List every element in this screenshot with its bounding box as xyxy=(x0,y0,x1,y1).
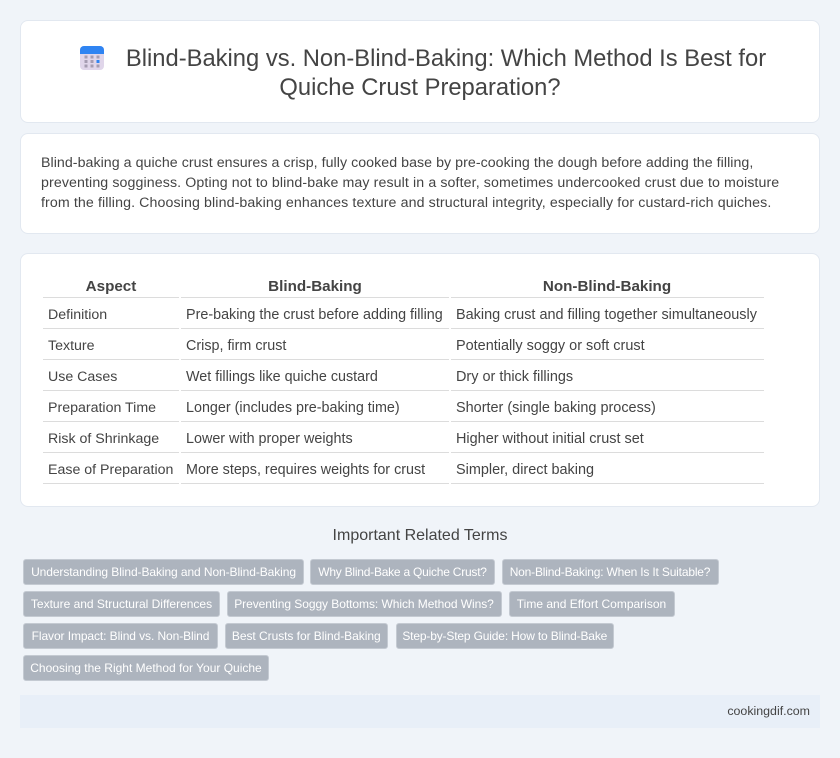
row: Definition: Baking crust and filling together simultaneously xyxy=(456,307,757,323)
row: Definition: Definition xyxy=(48,307,107,323)
intro text: from the filling. Choosing blind-baking enhances texture and structural integrity, especially for custard-rich quiches. xyxy=(41,195,771,211)
column header: Blind-Baking: Blind-Baking xyxy=(268,278,362,295)
panel: comparison table xyxy=(20,253,820,507)
footer source: cookingdif.com xyxy=(727,704,810,718)
panel: header xyxy=(20,20,820,123)
column header: Non-Blind-Baking: Non-Blind-Baking xyxy=(543,278,671,295)
tags: related terms xyxy=(23,559,719,681)
row: Texture: Texture xyxy=(48,338,95,354)
tags: related terms: Preventing Soggy Bottoms: Which Method Wins? xyxy=(234,597,494,611)
row: Preparation Time: Shorter (single baking process) xyxy=(456,400,656,416)
row: Definition xyxy=(48,307,757,323)
intro text: Blind-baking a quiche crust ensures a crisp, fully cooked base by pre-cooking the dough before adding the filling, xyxy=(41,155,753,171)
tags: related terms: Time and Effort Comparison xyxy=(517,597,666,611)
row: Definition: Pre-baking the crust before adding filling xyxy=(186,307,443,323)
tags: related terms: Flavor Impact: Blind vs. Non-Blind xyxy=(32,629,209,643)
row: Ease of Preparation xyxy=(48,462,594,478)
row: Risk of Shrinkage: Lower with proper weights xyxy=(186,431,353,447)
row: Texture: Potentially soggy or soft crust xyxy=(456,338,645,354)
title: Blind-Baking vs. Non-Blind-Baking: Which Method Is Best for xyxy=(126,45,766,72)
row: Preparation Time: Longer (includes pre-baking time) xyxy=(186,400,400,416)
column header: Aspect: Aspect xyxy=(86,278,136,295)
row: Ease of Preparation: More steps, requires weights for crust xyxy=(186,462,425,478)
row: Use Cases: Dry or thick fillings xyxy=(456,369,573,385)
row: Risk of Shrinkage: Risk of Shrinkage xyxy=(48,431,159,447)
row: Use Cases xyxy=(48,369,573,385)
panel: intro xyxy=(20,133,820,234)
tags: related terms: Non-Blind-Baking: When Is It Suitable? xyxy=(510,565,710,579)
tags: related terms: Texture and Structural Differences xyxy=(31,597,212,611)
footer bar xyxy=(20,695,820,728)
tags: related terms: Understanding Blind-Baking and Non-Blind-Baking xyxy=(31,565,296,579)
row: Use Cases: Wet fillings like quiche custard xyxy=(186,369,378,385)
tags: related terms: Choosing the Right Method for Your Quiche xyxy=(30,661,262,675)
row: Risk of Shrinkage: Higher without initial crust set xyxy=(456,431,644,447)
heading: related terms: Important Related Terms xyxy=(333,527,507,544)
tags: related terms: Why Blind-Bake a Quiche Crust? xyxy=(318,565,487,579)
tags: related terms: Best Crusts for Blind-Baking xyxy=(232,629,381,643)
tags: related terms: Step-by-Step Guide: How to Blind-Bake xyxy=(402,629,607,643)
row: Use Cases: Use Cases xyxy=(48,369,117,385)
title: Quiche Crust Preparation? xyxy=(279,74,561,101)
row: Ease of Preparation: Ease of Preparation xyxy=(48,462,173,478)
row: Ease of Preparation: Simpler, direct baking xyxy=(456,462,594,478)
row: Risk of Shrinkage xyxy=(48,431,644,447)
row: Texture xyxy=(48,338,645,354)
icon: calendar xyxy=(80,46,104,70)
title xyxy=(126,45,766,101)
intro text xyxy=(41,155,779,211)
row: Preparation Time: Preparation Time xyxy=(48,400,156,416)
row: Preparation Time xyxy=(48,400,656,416)
intro text: preventing sogginess. Opting not to blind-bake may result in a softer, sometimes undercooked crust due to moisture xyxy=(41,175,779,191)
row: Texture: Crisp, firm crust xyxy=(186,338,286,354)
